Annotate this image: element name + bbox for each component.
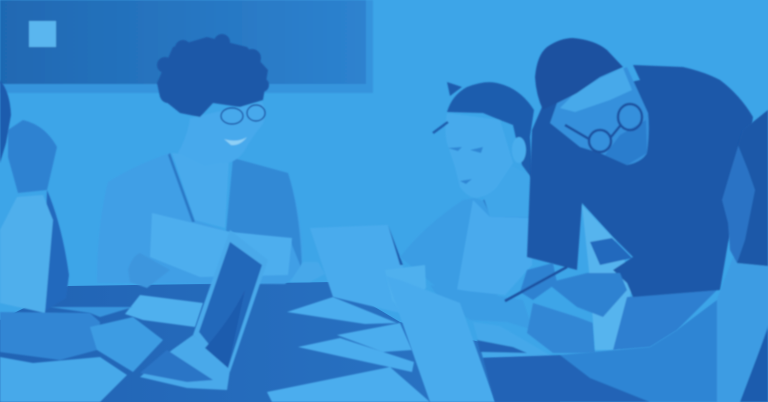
- hair bun: [447, 82, 462, 96]
- person: curly-haired woman: [97, 34, 302, 284]
- glasses: [565, 104, 642, 152]
- face: [550, 67, 649, 165]
- forearm: [430, 285, 533, 330]
- sweater: [527, 65, 753, 297]
- sweater: [400, 198, 533, 310]
- hand right of paper: [290, 262, 325, 282]
- laptop: left: [140, 230, 268, 390]
- person: standing man in dark sweater: [505, 38, 753, 350]
- pen: [505, 267, 567, 301]
- eyes and mouth: [448, 147, 483, 184]
- dark sleeve: [483, 355, 650, 402]
- papers on table: [50, 295, 430, 402]
- trousers: [613, 290, 717, 350]
- other hand: [520, 263, 557, 300]
- coffee cup: [385, 265, 426, 312]
- neck and face: [178, 102, 265, 166]
- glasses: [221, 105, 265, 124]
- sleeve: [560, 258, 768, 402]
- person: right, seated man: [483, 110, 768, 402]
- table: [0, 282, 560, 402]
- hand on paper: [128, 253, 170, 288]
- jacket: [97, 153, 302, 284]
- hair strand: [433, 122, 448, 133]
- head: [722, 110, 768, 266]
- collar: [717, 258, 768, 402]
- person: center woman: [400, 82, 595, 353]
- sticky note: [29, 21, 56, 47]
- chair: [590, 238, 632, 265]
- hair: [535, 38, 623, 110]
- smile: [224, 137, 247, 145]
- tablet and table edge: [473, 322, 553, 358]
- laptop: foreground: [386, 276, 495, 402]
- notice board: [0, 0, 373, 93]
- person: left, raised fist: [0, 80, 163, 402]
- ear: [512, 137, 526, 163]
- cuff and sleeve: [527, 303, 595, 353]
- shirt: [740, 328, 768, 402]
- hair: [447, 82, 534, 180]
- paper held by woman: [150, 213, 292, 277]
- face: [446, 113, 513, 198]
- curly hair: [157, 37, 268, 117]
- neck: [483, 165, 533, 217]
- laptop: center back: [310, 225, 403, 313]
- pointing hand: [547, 273, 627, 317]
- wall gap light: [582, 205, 633, 350]
